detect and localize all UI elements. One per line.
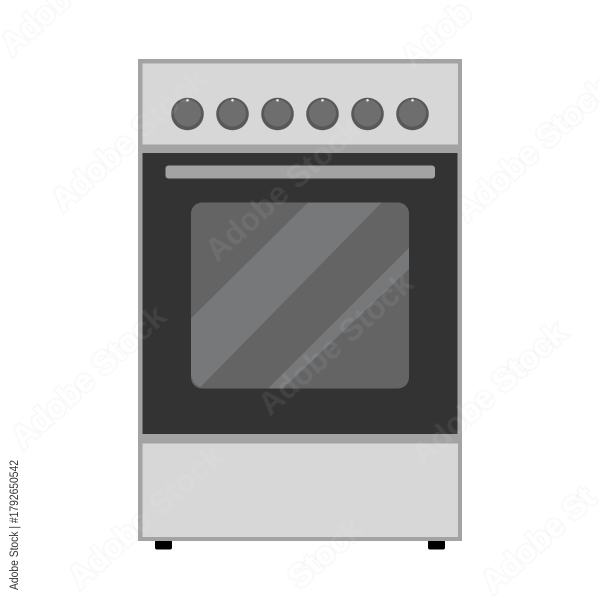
window glare: wide — [191, 202, 382, 387]
watermarks on background: Stock — [281, 510, 370, 595]
watermarks on background: Adobe St — [474, 479, 600, 600]
watermarks over stove: Adobe Stock — [61, 437, 230, 595]
watermarks over stove: Adobe Stock — [44, 60, 213, 218]
knob 2 — [216, 98, 249, 130]
watermarks on background: Adobe Stock — [61, 437, 230, 595]
watermarks over stove: Adobe Stock — [251, 264, 420, 422]
knob 1 — [171, 98, 204, 130]
knob 4 — [306, 98, 339, 130]
watermarks over stove: Stock — [281, 510, 370, 595]
stove body — [138, 59, 462, 541]
control panel — [142, 64, 458, 144]
knob 3 — [261, 98, 294, 130]
oven window — [191, 202, 409, 388]
watermarks over stove: Adobe Stock — [198, 110, 367, 268]
knob 6 — [396, 98, 429, 130]
watermarks on background: Adobe Stock — [4, 297, 173, 455]
stock id text: Adobe Stock | #1792650542 — [9, 460, 21, 590]
door handle — [166, 166, 435, 178]
window glare: narrow — [268, 248, 409, 388]
watermarks on background: Adobe Stock — [404, 314, 573, 472]
watermarks over stove: Adobe Stock — [404, 314, 573, 472]
bottom drawer — [142, 444, 458, 537]
watermarks on background: Adobe Stock — [44, 60, 213, 218]
knobs — [171, 98, 429, 130]
foot: right — [428, 540, 445, 550]
foot: left — [155, 540, 172, 550]
watermarks over stove: Adobe Stock — [4, 297, 173, 455]
knob 5 — [351, 98, 384, 130]
oven door — [142, 153, 458, 434]
